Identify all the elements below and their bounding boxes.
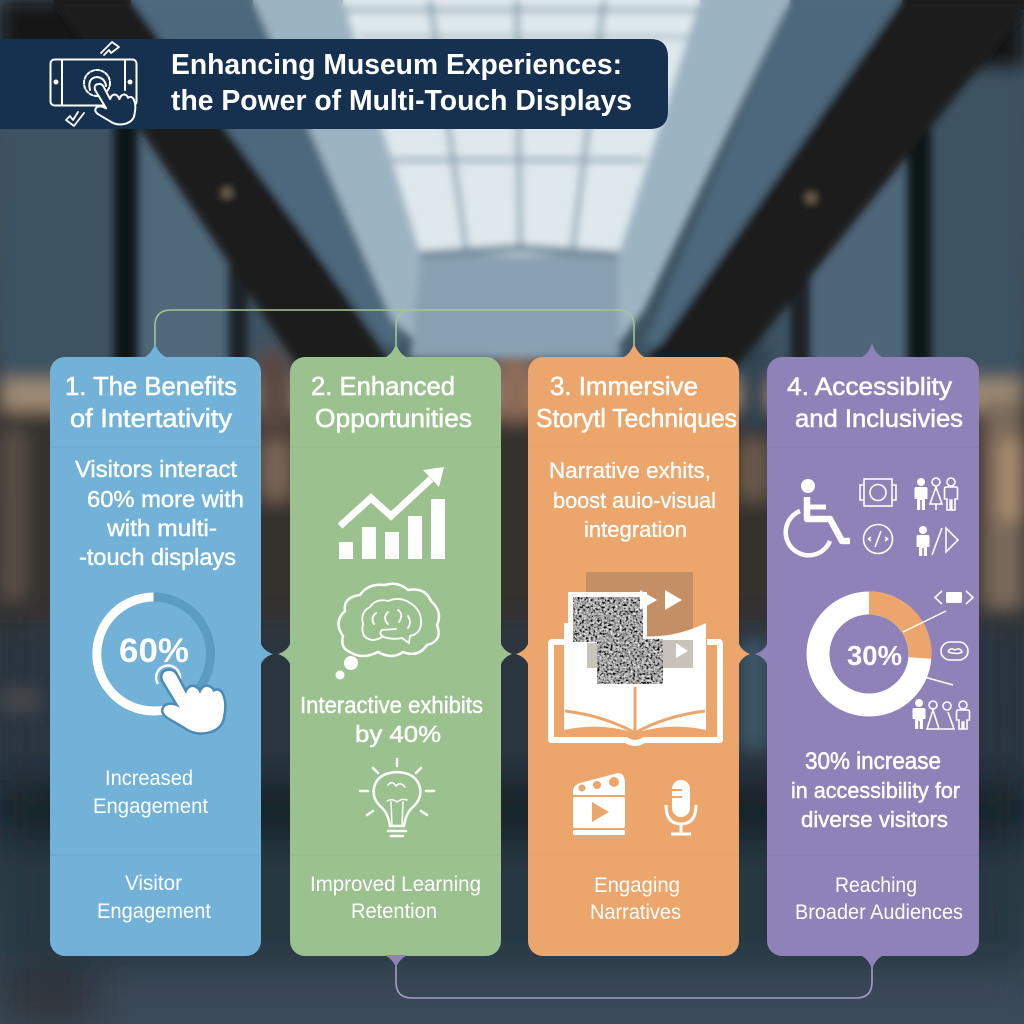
heading: panel 2 (311, 371, 472, 433)
panel: 4 accessibility and inclusivity (384, 343, 979, 970)
text: visitor engagement: Engagement (97, 900, 211, 923)
icon: clapperboard (573, 773, 625, 835)
text: engaging narratives: Engaging (594, 874, 680, 897)
heading: panel 1: of Intertativity (70, 403, 232, 433)
icon: light bulb (360, 759, 434, 836)
heading: panel 4 (787, 373, 963, 433)
chart: 60% progress ring (96, 597, 210, 711)
text: 30% increase in accessibility (791, 748, 960, 832)
text: reaching broader audiences (795, 874, 963, 924)
heading: panel 1 (65, 371, 237, 433)
connector line: bottom bracket (396, 960, 872, 998)
heading: title (171, 49, 632, 117)
icons: accessibility symbols (860, 478, 958, 556)
text: interactive exhibits (300, 692, 483, 747)
text: engaging narratives (590, 874, 681, 924)
text: visitor engagement: Visitor (125, 872, 182, 895)
icon: touch tablet (50, 42, 136, 126)
text: interaction statistic: Visitors interact (75, 456, 238, 482)
heading: panel 1: 1. The Benefits (65, 371, 237, 401)
heading: panel 2: Opportunities (315, 403, 472, 433)
text: 30% increase in accessibility: in accessibility for (791, 778, 960, 803)
text: interaction statistic: 60% more with (87, 486, 244, 512)
chart: 30% donut: 30% (847, 640, 902, 671)
icons: donut callouts (912, 591, 973, 729)
title banner (0, 39, 668, 129)
text: narrative exhibits: Narrative exhits, (549, 458, 711, 483)
text: interaction statistic: with multi- (106, 515, 217, 541)
heading: panel 2: 2. Enhanced (311, 371, 455, 401)
icon: open book with photos and video (551, 572, 720, 743)
icon: pointing hand (156, 666, 224, 732)
text: narrative exhibits: boost auio-visual (553, 488, 716, 513)
chart icon: rising bars with arrow (339, 467, 445, 559)
text: interaction statistic (75, 456, 244, 570)
text: interaction statistic: -touch displays (79, 544, 236, 570)
icon: brain in thought cloud (336, 584, 439, 680)
heading: panel 3: Storytl Techniques (536, 403, 737, 433)
text: improved learning retention (310, 873, 481, 923)
heading: title: the Power of Multi-Touch Displays (171, 85, 632, 117)
panel: 1 benefits of interactivity (50, 343, 273, 956)
panel: 3 immersive storytelling (516, 343, 750, 956)
text: visitor engagement (97, 872, 211, 923)
text: 30% increase in accessibility: diverse visitors (801, 807, 948, 832)
text: reaching broader audiences: Reaching (835, 874, 917, 897)
icon: microphone (666, 780, 696, 834)
text: narrative exhibits: integration (584, 517, 687, 542)
text: improved learning retention: Retention (351, 900, 437, 923)
connector lines: top bracket (155, 310, 634, 345)
text: improved learning retention: Improved Learning (310, 873, 481, 896)
text: interactive exhibits: by 40% (355, 721, 441, 747)
text: increased engagement: Engagement (93, 795, 208, 818)
heading: title: Enhancing Museum Experiences: (171, 49, 622, 81)
icon: wheelchair (786, 479, 850, 555)
heading: panel 3 (536, 371, 737, 433)
text: narrative exhibits (549, 458, 716, 542)
text: reaching broader audiences: Broader Audiences (795, 901, 963, 924)
text: engaging narratives: Narratives (590, 901, 681, 924)
text: 30% increase in accessibility: 30% increase (805, 748, 941, 775)
heading: panel 4: 4. Accessiblity (787, 373, 953, 401)
chart: 60% progress ring: 60% (119, 632, 189, 670)
text: increased engagement: Increased (105, 767, 193, 790)
panel: 2 enhanced opportunities (278, 343, 512, 956)
heading: panel 4: and Inclusivies (795, 405, 963, 433)
heading: panel 3: 3. Immersive (550, 371, 698, 401)
text: interactive exhibits: Interactive exhibits (300, 692, 483, 718)
text: increased engagement (93, 767, 208, 818)
chart: 30% donut (818, 603, 953, 705)
